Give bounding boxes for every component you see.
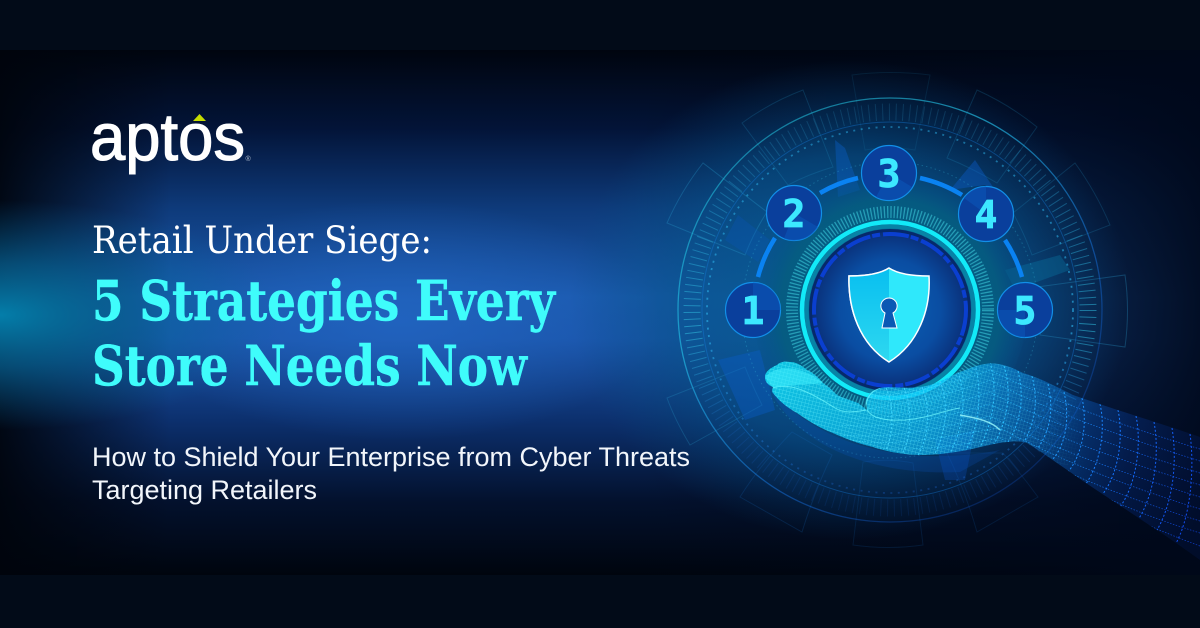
thumb and finger shading: [866, 388, 960, 420]
bright wedges: [718, 140, 1070, 480]
title: 5 Strategies Every Store Needs Now: [92, 268, 557, 398]
thick arc segments: [758, 178, 1022, 277]
number badges 1 to 5: [726, 146, 1052, 338]
title: 5 Strategies Every Store Needs Now: 5 Strategies Every: [92, 268, 557, 333]
logo wordmark: aptos: [90, 100, 245, 175]
wireframe hand: [760, 355, 1200, 565]
icon: shield with keyhole: [849, 268, 929, 362]
badge 2: [766, 186, 822, 241]
hand body: [760, 355, 1200, 565]
badge 3: 3: [878, 152, 900, 196]
logo accent triangle: [193, 114, 206, 121]
core disc: [812, 232, 968, 388]
heading: Retail Under Siege: Retail Under Siege:: [92, 219, 432, 262]
dotted ring: [707, 127, 1073, 493]
outline panels: [667, 72, 1128, 548]
badge 5: [998, 282, 1052, 338]
fine dotted ring: [742, 162, 1038, 458]
badge 4: 4: [975, 193, 997, 237]
radial HUD rings: [667, 72, 1128, 548]
subtitle: [92, 442, 690, 505]
hand glow: [765, 377, 1000, 472]
teal disc: [753, 173, 1027, 447]
logo: aptos: [90, 100, 252, 175]
title: 5 Strategies Every Store Needs Now: Store Needs Now: [92, 333, 528, 398]
badge 5: 5: [1014, 289, 1036, 333]
central lens with shield: [800, 220, 980, 400]
tick ring: [692, 112, 1088, 508]
cyan ring glow: [800, 220, 980, 400]
outer ring: [678, 98, 1102, 522]
badge 4: [958, 186, 1014, 242]
badge 2: 2: [783, 192, 805, 236]
longitudinal mesh lines: [840, 370, 1200, 546]
keyhole: [881, 298, 897, 328]
badge 1: [726, 282, 780, 338]
thin ring: [702, 122, 1078, 498]
badge 1: 1: [742, 289, 764, 333]
blue tick band: [814, 234, 966, 386]
badge 3: [862, 146, 916, 200]
subtitle: How to Shield Your Enterprise from Cyber Threats: [92, 442, 690, 472]
hatched ring: [792, 212, 988, 408]
cross mesh lines: [886, 362, 1192, 545]
subtitle: Targeting Retailers: [92, 475, 317, 505]
logo registered mark: ®: [246, 155, 252, 163]
